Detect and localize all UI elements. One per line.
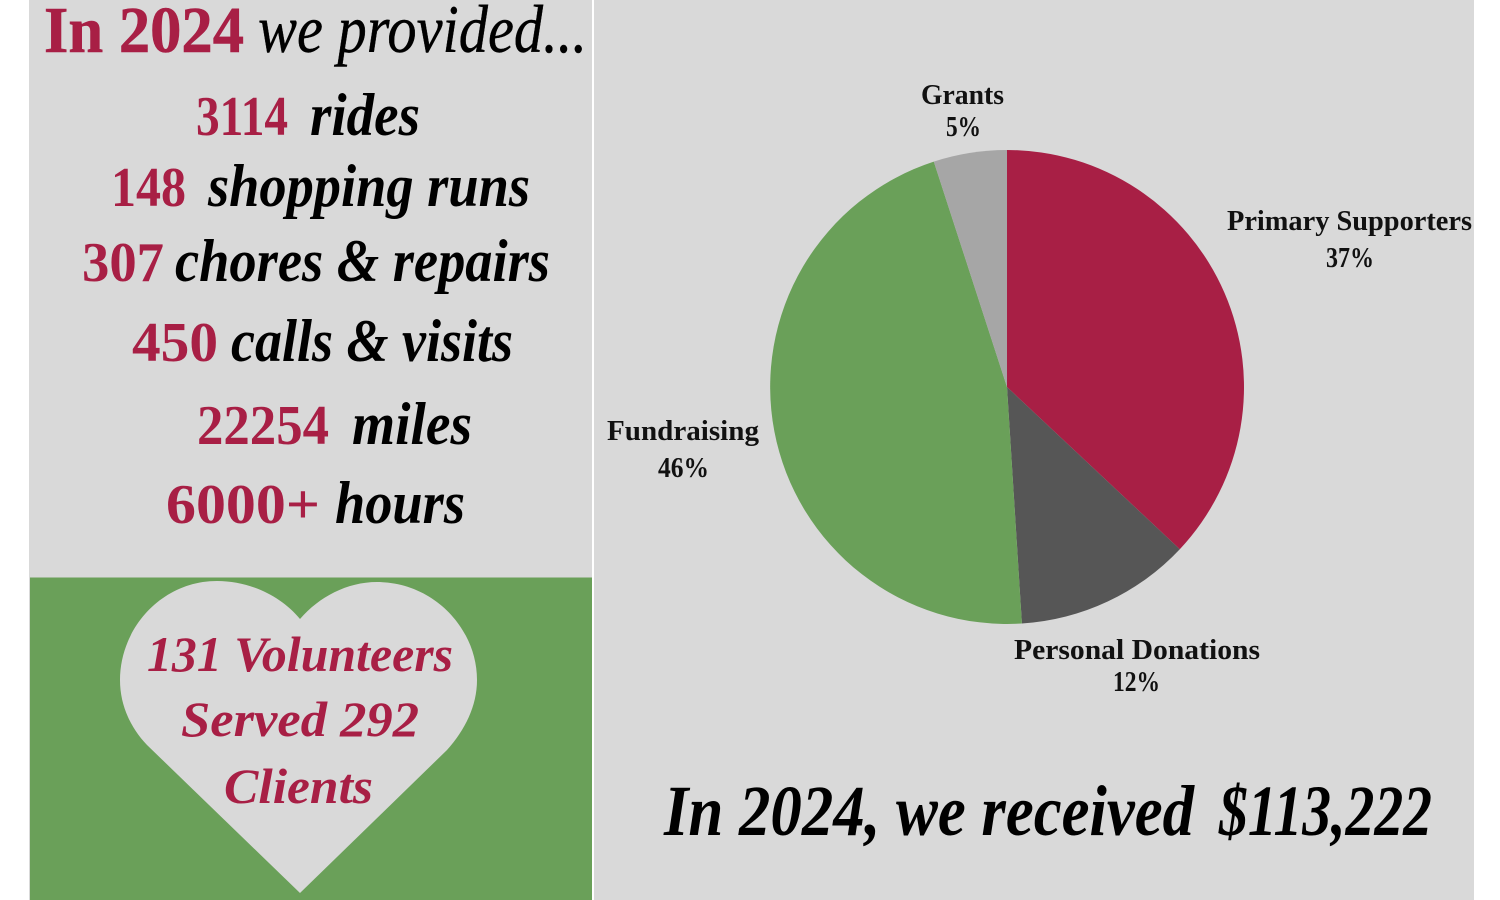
label: personal donations: 12%: [1113, 667, 1160, 698]
stat: hours: [166, 470, 465, 536]
stat: calls and visits: 450: [132, 312, 218, 374]
stat: rides: rides: [310, 82, 420, 148]
pie chart: [770, 150, 1244, 624]
stat: miles: 22254: [197, 395, 329, 457]
stat: shopping runs: shopping runs: [207, 153, 530, 219]
label: fundraising: Fundraising: [607, 416, 759, 447]
label: primary supporters: [1227, 206, 1472, 274]
panel: services provided: [29, 0, 592, 577]
label: personal donations: Personal Donations: [1014, 635, 1260, 666]
text: volunteers served clients: [147, 626, 453, 814]
label: fundraising: 46%: [658, 453, 709, 484]
slice: fundraising: [770, 162, 1022, 624]
panel: volunteers: [29, 577, 592, 900]
label: grants: [921, 80, 1004, 143]
slice: personal donations: [1007, 387, 1180, 624]
heading: in 2024 we provided: [44, 0, 587, 67]
label: grants: Grants: [921, 80, 1004, 111]
stat: calls and visits: [132, 308, 513, 374]
stat: hours: 6000+: [166, 474, 320, 536]
label: grants: 5%: [946, 112, 981, 143]
stat: hours: hours: [335, 470, 465, 536]
stat: calls and visits: calls & visits: [231, 308, 513, 374]
label: primary supporters: Primary Supporters: [1227, 206, 1472, 237]
heading: total received: In 2024, we received: [663, 771, 1195, 851]
label: primary supporters: 37%: [1326, 243, 1374, 274]
slice: primary supporters: [1007, 150, 1244, 549]
stat: chores and repairs: 307: [82, 232, 164, 294]
label: fundraising: [607, 416, 759, 484]
text: volunteers served clients: 131 Volunteers: [147, 626, 453, 682]
text: volunteers served clients: Clients: [224, 758, 373, 814]
stat: miles: [197, 391, 472, 457]
icon: heart: [120, 581, 477, 893]
stat: rides: 3114: [196, 86, 288, 148]
stat: chores and repairs: chores & repairs: [175, 228, 550, 294]
stat: rides: [196, 82, 420, 148]
slice: grants: [934, 150, 1007, 387]
text: volunteers served clients: Served 292: [181, 691, 419, 747]
heading: total received: $113,222: [1218, 771, 1432, 851]
stat: miles: miles: [352, 391, 472, 457]
panel: funding: [594, 0, 1474, 900]
stat: shopping runs: 148: [111, 157, 186, 219]
label: personal donations: [1014, 635, 1260, 698]
